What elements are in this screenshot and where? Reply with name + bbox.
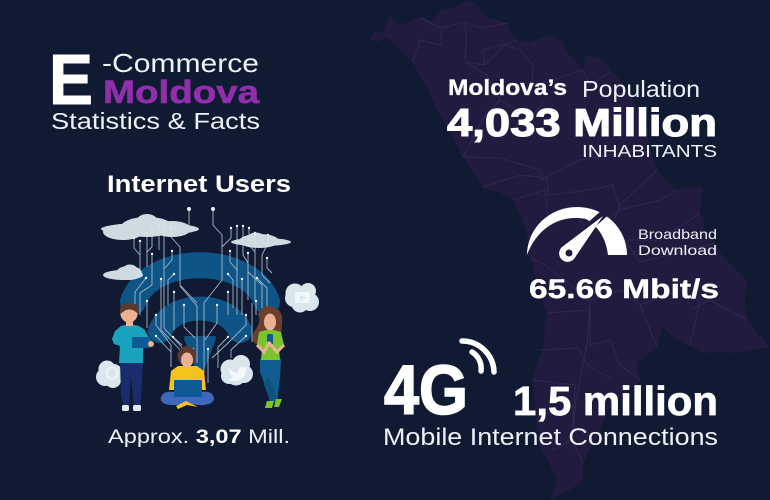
person: seated woman with laptop [161,346,214,409]
cloud: large top left [101,214,199,240]
stat: Moldova's population [447,75,717,161]
circuit glow dots [133,207,269,350]
label: Population: Population [582,76,700,102]
icon: Twitter cloud [220,355,253,386]
icon: 4G with signal arcs: 4G [384,351,468,429]
label: inhabitants: INHABITANTS [582,141,717,161]
label: Broadband: Broadband [638,226,717,242]
stat: mobile internet connections [383,378,718,451]
icon: WhatsApp cloud [96,360,122,388]
illustration: wifi, people and social clouds [96,207,319,411]
value: 4,033 Million: 4,033 Million [447,102,717,145]
title line: -Commerce: -Commerce [102,48,259,78]
heading: Internet Users: Internet Users [107,171,291,198]
label: Download: Download [638,242,717,258]
circuit lines [134,209,272,383]
icon: YouTube cloud [285,283,319,312]
map of Moldova [370,0,770,500]
cloud: small left [103,264,143,280]
caption: approx internet users: Approx. 3,07 Mill. [108,426,290,448]
value: 1,5 million: 1,5 million [513,378,718,424]
person: man with tablet [112,303,154,411]
title letter E: E [49,41,93,120]
wifi symbol [133,265,267,368]
label: Moldova's: Moldova’s [448,75,567,100]
label: Mobile Internet Connections: Mobile Internet Connections [383,424,718,451]
title [49,41,260,134]
person: woman with phone [252,306,284,408]
subtitle: Statistics & Facts [51,108,260,134]
stat: broadband download [529,226,719,304]
title line: Moldova: Moldova [103,74,259,110]
icon: speedometer gauge [527,207,627,262]
cloud: top right [231,232,291,248]
value: 65.66 Mbit/s: 65.66 Mbit/s [529,274,719,304]
